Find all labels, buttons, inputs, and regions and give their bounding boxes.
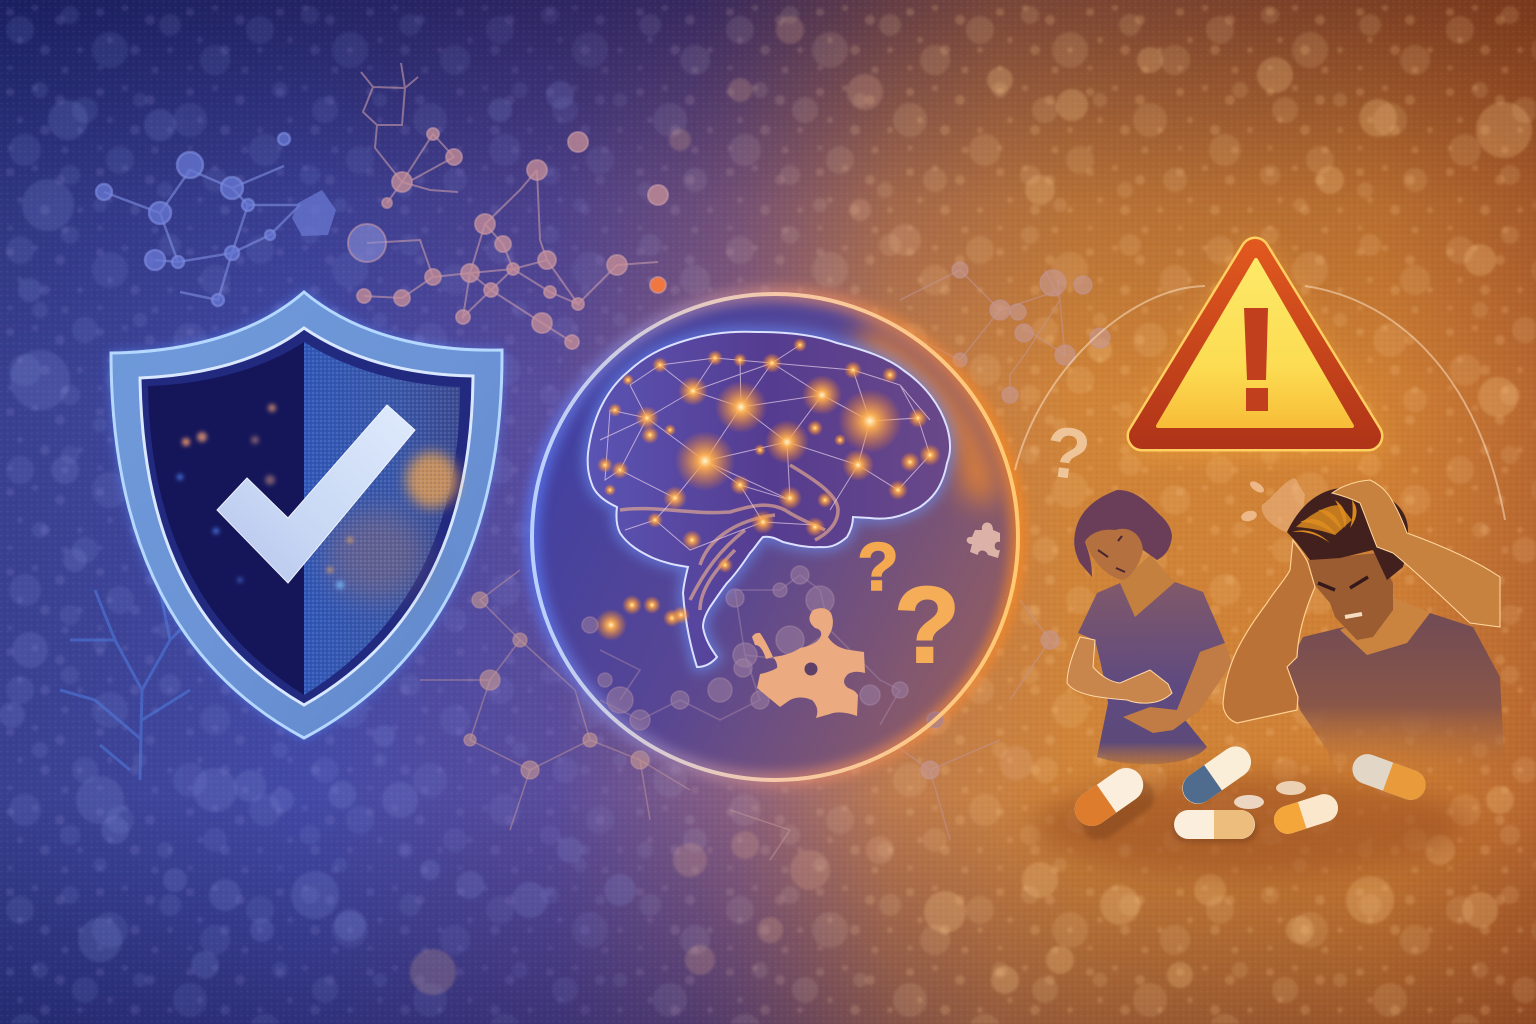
glowing nodes (597, 338, 941, 573)
man's neck (1340, 597, 1430, 655)
neural links (600, 345, 930, 550)
thought fragments (1240, 478, 1305, 532)
puzzle hole (804, 662, 818, 676)
triangle outline (1142, 252, 1368, 436)
woman's right arm (1123, 643, 1232, 733)
floor shadow under pills (1035, 775, 1465, 875)
puzzle piece small (967, 522, 1000, 558)
checkmark (217, 405, 415, 583)
woman's eyes and mouth (1098, 536, 1125, 572)
puzzle piece large (757, 608, 865, 718)
woman's dress (1078, 582, 1225, 764)
man's hair (1287, 488, 1408, 580)
stray neural sparks (595, 595, 690, 641)
shield inner bevel (140, 328, 473, 705)
hair highlight strands (1292, 500, 1357, 543)
brain folds (620, 465, 838, 610)
question mark large: ? (894, 564, 960, 685)
warning triangle (1015, 235, 1505, 520)
triangle fill (1158, 260, 1352, 426)
shield lower warm tone (325, 510, 425, 600)
capsule: orange and white (1066, 760, 1161, 847)
shield right face (304, 342, 460, 695)
man with headache (1223, 480, 1505, 775)
shield left face (148, 342, 304, 695)
inner orange glow (850, 325, 998, 500)
woman's hair (1074, 490, 1172, 577)
disc inner network (582, 566, 943, 730)
woman holding stomach (1067, 490, 1232, 764)
brain (588, 332, 950, 667)
tablet (1234, 795, 1264, 809)
man's mouth (1345, 614, 1362, 617)
shield sparkles (177, 404, 353, 589)
shield with checkmark (111, 292, 502, 738)
capsule: cream and tan (1172, 810, 1257, 843)
capsule: grey and orange (1348, 750, 1430, 804)
capsule: orange and cream (1270, 790, 1342, 838)
man's near arm (1223, 540, 1315, 723)
woman's face (1085, 525, 1143, 580)
man's far arm (1332, 480, 1500, 627)
capsule: blue and cream (1176, 740, 1257, 810)
man's brow (1318, 577, 1368, 590)
exclamation dot (1246, 388, 1268, 411)
molecular network: lower centre and right (420, 262, 1110, 860)
molecular network: upper centre (348, 63, 668, 349)
triangle frame (1142, 252, 1368, 436)
shield rim (111, 292, 502, 738)
faint halo arc (1015, 286, 1505, 520)
man's head (1308, 553, 1393, 640)
floating question mark: ? (1040, 411, 1095, 497)
veins: lower left (60, 590, 200, 780)
tablet (1276, 781, 1306, 795)
brain outline (588, 332, 950, 667)
woman's left arm (1067, 637, 1172, 703)
shield orange reflection (406, 452, 458, 508)
exclamation bar (1244, 308, 1268, 380)
brain circle (532, 294, 1018, 780)
man's torso (1287, 613, 1505, 775)
woman's neck (1120, 555, 1175, 617)
puzzle tab (752, 633, 773, 659)
molecular network: top left (96, 133, 336, 306)
question mark small: ? (857, 529, 899, 605)
shield speckle (304, 342, 460, 695)
